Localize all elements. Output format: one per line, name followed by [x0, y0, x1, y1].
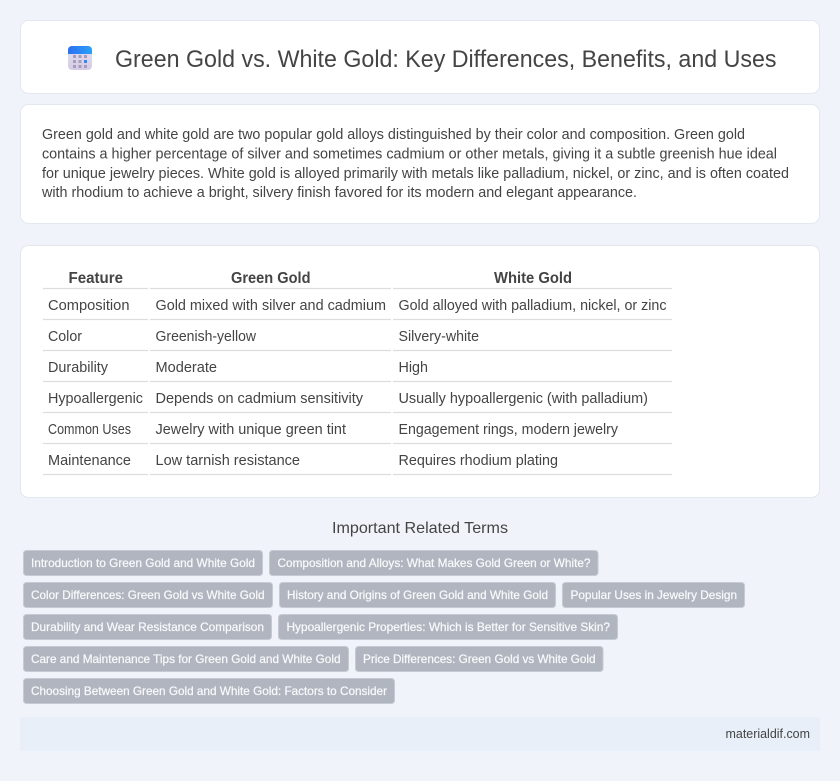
tag: Introduction to Green Gold and White Gold [31, 556, 255, 570]
table row: durability: Moderate [156, 360, 217, 376]
table row: hypoallergenic: Usually hypoallergenic (with palladium) [398, 391, 648, 407]
table row: maintenance: Maintenance [48, 453, 131, 469]
tag [280, 582, 556, 608]
table header row [43, 270, 672, 288]
tag [270, 550, 598, 576]
panel: header [20, 20, 820, 94]
tag list: related terms [24, 550, 744, 704]
text block: introduction paragraph [41, 127, 789, 201]
text block: introduction paragraph: with rhodium to achieve a bright, silvery finish favored for its modern and elegant appearance. [41, 185, 637, 201]
footer source text: materialdif.com [726, 727, 810, 741]
table row: color: Greenish-yellow [156, 329, 257, 345]
table row: maintenance: Requires rhodium plating [398, 453, 558, 469]
table row: composition: Composition [48, 298, 130, 314]
tag: Popular Uses in Jewelry Design [570, 588, 737, 602]
tag [562, 582, 744, 608]
table row: hypoallergenic: Hypoallergenic [48, 391, 143, 407]
table row: common uses: Jewelry with unique green tint [156, 422, 346, 438]
panel: comparison table [20, 246, 820, 498]
tag [24, 678, 394, 704]
table row: durability [43, 360, 672, 382]
footer [20, 717, 820, 751]
table row: composition [43, 298, 672, 320]
tag: History and Origins of Green Gold and White Gold [287, 588, 548, 602]
tag: Color Differences: Green Gold vs White Gold [31, 588, 264, 602]
table header row: White Gold [494, 270, 572, 287]
tag: Composition and Alloys: What Makes Gold Green or White? [278, 556, 591, 570]
table row: hypoallergenic: Depends on cadmium sensitivity [156, 391, 364, 407]
tag [24, 646, 348, 672]
table row: common uses: Common Uses [48, 422, 131, 438]
icon: calendar [68, 46, 92, 70]
title: Green Gold vs. White Gold: Key Differences, Benefits, and Uses [115, 46, 776, 73]
table row: composition: Gold mixed with silver and cadmium [156, 298, 386, 314]
tag [278, 614, 618, 640]
tag: Durability and Wear Resistance Comparison [31, 620, 264, 634]
table header row: Feature [68, 270, 123, 287]
table row: common uses: Engagement rings, modern jewelry [398, 422, 619, 438]
heading: important related terms: Important Related Terms [332, 520, 508, 537]
tag: Care and Maintenance Tips for Green Gold and White Gold [31, 652, 340, 666]
tag [356, 646, 603, 672]
tag [24, 550, 262, 576]
table row: hypoallergenic [43, 391, 672, 412]
table row: color: Silvery-white [398, 329, 479, 345]
text block: introduction paragraph: for unique jewelry pieces. White gold is alloyed primarily with metals like palladium, nickel, or zinc, and is often coated [42, 166, 789, 182]
table row: common uses [43, 422, 672, 444]
tag [24, 614, 272, 640]
panel: introduction [20, 104, 820, 224]
table row: color [43, 329, 672, 350]
tag: Hypoallergenic Properties: Which is Better for Sensitive Skin? [286, 620, 610, 634]
table row: durability: Durability [48, 360, 109, 376]
text block: introduction paragraph: Green gold and white gold are two popular gold alloys distinguished by their color and composition. Green gold [42, 127, 745, 143]
text block: introduction paragraph: contains a higher percentage of silver and sometimes cadmium or other metals, giving it a subtle greenish hue ideal [42, 146, 777, 162]
table row: durability: High [398, 360, 428, 376]
table header row: Green Gold [231, 270, 310, 287]
tag: Choosing Between Green Gold and White Gold: Factors to Consider [31, 684, 387, 698]
table row: maintenance: Low tarnish resistance [156, 453, 300, 469]
tag: Price Differences: Green Gold vs White Gold [363, 652, 596, 666]
table row: maintenance [43, 453, 672, 474]
tag [24, 582, 272, 608]
table row: color: Color [48, 329, 82, 345]
table row: composition: Gold alloyed with palladium, nickel, or zinc [398, 298, 666, 314]
